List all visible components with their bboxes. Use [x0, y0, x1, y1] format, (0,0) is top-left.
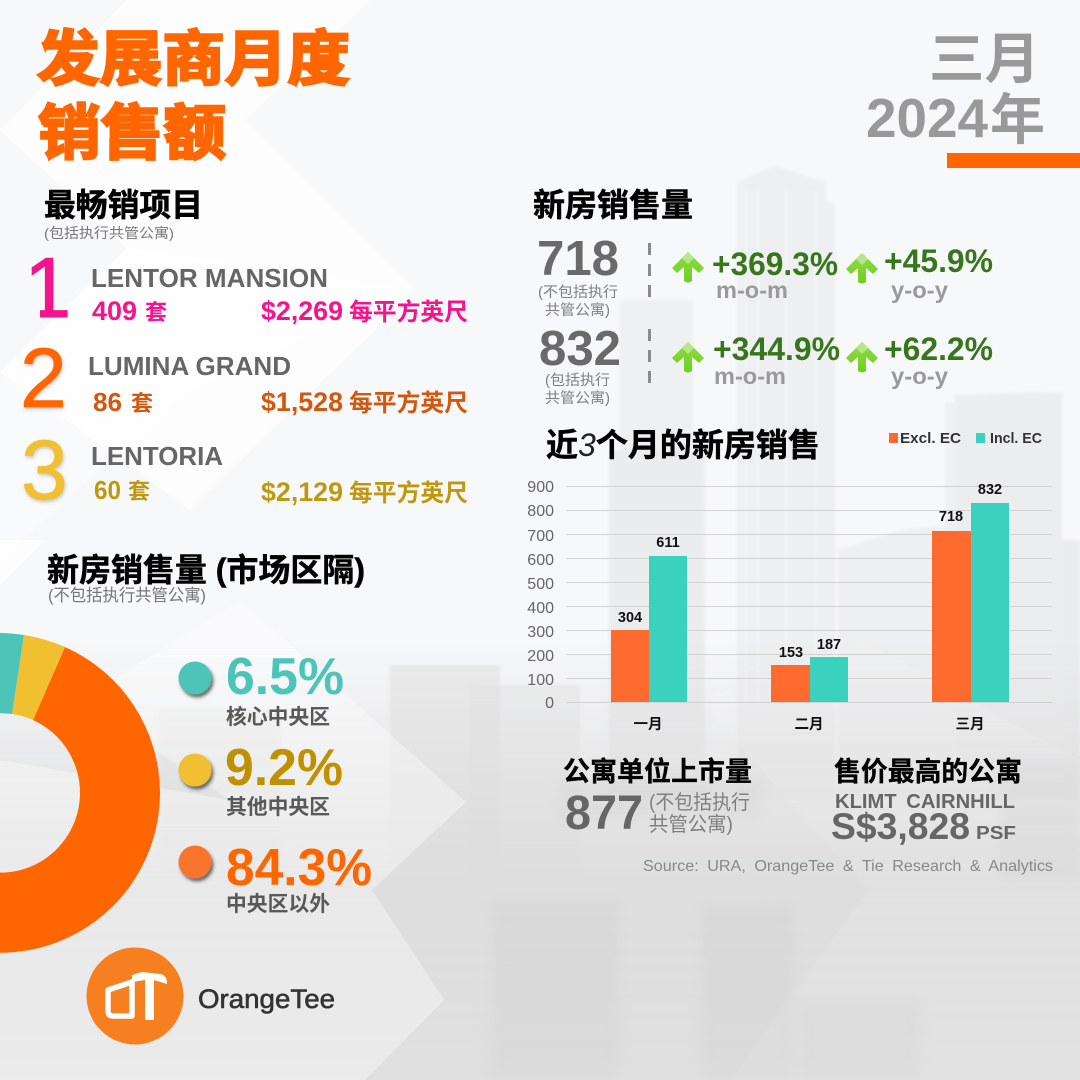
- bar chart: 153: [779, 645, 803, 661]
- legend: other central region: [178, 739, 343, 819]
- project 2: Lumina Grand: LUMINA GRAND: [88, 351, 291, 381]
- project 1: Lentor Mansion: 1: [24, 241, 71, 336]
- bar chart: 700: [527, 528, 554, 545]
- bar chart: 一月: [634, 717, 662, 733]
- stat: highest priced condo: PSF: [976, 823, 1016, 843]
- change row: excluding EC: +369.3%: [712, 246, 838, 282]
- change row: including EC: y-o-y: [891, 363, 948, 389]
- segment: outside central region: [0, 647, 160, 953]
- change row: excluding EC: [672, 243, 993, 303]
- date heading: 年: [990, 89, 1045, 151]
- project 3: Lentoria: $2,129: [261, 477, 343, 507]
- legend: core central region: 6.5%: [226, 648, 344, 706]
- change row: including EC: [672, 331, 993, 389]
- chart legend: Incl. EC: [990, 430, 1042, 447]
- stat: highest priced condo: [831, 757, 1022, 847]
- project 2: Lumina Grand: 每平方英尺: [349, 389, 468, 417]
- heading: top-selling projects: [44, 187, 203, 241]
- project 1: Lentor Mansion: [32, 258, 468, 324]
- bar chart: 500: [527, 576, 554, 593]
- bar chart: 三月: [956, 717, 984, 733]
- change row: excluding EC: y-o-y: [891, 277, 948, 303]
- date heading: 三月: [929, 28, 1040, 90]
- bar chart: 200: [527, 648, 554, 665]
- heading: sales by market segment: (不包括执行共管公寓): [48, 586, 206, 605]
- bar chart: 718: [939, 509, 963, 525]
- project 3: Lentoria: 3: [21, 423, 68, 517]
- bar chart: 304: [618, 610, 642, 626]
- change row: including EC: m-o-m: [714, 363, 786, 389]
- chart legend: [889, 430, 1042, 447]
- source note: Source: URA, OrangeTee & Tie Research & Analytics: [643, 858, 1053, 875]
- heading: top-selling projects: (包括执行共管公寓): [44, 225, 174, 241]
- stat: 718 excluding EC: (不包括执行: [538, 284, 618, 301]
- stat: 718 excluding EC: [537, 232, 619, 319]
- icon: up arrow: [672, 252, 704, 282]
- legend: outside central region: 中央区以外: [226, 893, 330, 916]
- legend: other central region: 其他中央区: [226, 796, 330, 819]
- bar chart: 900: [527, 479, 554, 496]
- stat: highest priced condo: 售价最高的公寓: [834, 757, 1022, 787]
- bar chart: 600: [527, 552, 554, 569]
- stat: 718 excluding EC: 718: [537, 232, 619, 286]
- change row: excluding EC: +45.9%: [884, 243, 993, 279]
- project 2: Lumina Grand: 86: [93, 387, 122, 417]
- stat: 832 including EC: 832: [539, 322, 621, 376]
- date accent bar: [947, 153, 1080, 168]
- chart legend: Excl. EC: [900, 430, 961, 447]
- legend: core central region: [178, 648, 344, 729]
- stat: launched units: 877: [565, 787, 643, 840]
- title: 发展商月度: [37, 26, 350, 93]
- project 3: Lentoria: 60: [94, 475, 121, 505]
- legend: outside central region: [178, 839, 372, 916]
- bar chart: 0: [545, 695, 554, 712]
- legend: core central region: 核心中央区: [226, 705, 330, 729]
- project 1: Lentor Mansion: LENTOR MANSION: [91, 263, 328, 293]
- stat: launched units: 共管公寓): [649, 813, 733, 836]
- heading: top-selling projects: 最畅销项目: [44, 187, 203, 223]
- project 1: Lentor Mansion: 套: [145, 300, 167, 325]
- icon: up arrow: [672, 342, 704, 372]
- change row: including EC: +62.2%: [884, 331, 993, 367]
- legend: outside central region: 84.3%: [226, 839, 372, 897]
- stat: 832 including EC: [539, 322, 621, 407]
- icon: up arrow: [846, 253, 878, 284]
- segment: other central region: [12, 635, 65, 720]
- logo: OrangeTee: [86, 948, 335, 1044]
- stat: highest priced condo: S$3,828: [831, 806, 970, 847]
- title: [37, 26, 350, 167]
- heading: sales by market segment: [47, 552, 365, 605]
- bar chart: 400: [527, 600, 554, 617]
- icon: up arrow: [846, 342, 878, 372]
- project 3: Lentoria: 每平方英尺: [349, 479, 468, 507]
- bar chart: 二月: [794, 717, 824, 733]
- stat: 832 including EC: (包括执行: [545, 372, 610, 389]
- stat: highest priced condo: KLIMT CAIRNHILL: [835, 791, 1015, 813]
- stat: launched units: (不包括执行: [649, 791, 750, 814]
- heading: new home sales: 新房销售量: [533, 187, 693, 223]
- stat: 832 including EC: 共管公寓): [545, 389, 610, 407]
- bar chart: [527, 479, 1052, 733]
- logo: OrangeTee: OrangeTee: [198, 984, 335, 1014]
- segment: core central region: [0, 633, 24, 714]
- project 3: Lentoria: 套: [128, 479, 150, 504]
- heading: last 3 months new sales: 近3个月的新房销售: [546, 427, 820, 463]
- donut chart: [0, 633, 160, 953]
- project 2: Lumina Grand: [20, 331, 468, 425]
- bar chart: 800: [527, 503, 554, 520]
- project 1: Lentor Mansion: 每平方英尺: [349, 298, 468, 326]
- legend: other central region: 9.2%: [225, 739, 343, 797]
- date heading: [866, 28, 1045, 151]
- project 2: Lumina Grand: 2: [20, 331, 67, 425]
- bar chart: 100: [527, 672, 554, 689]
- project 2: Lumina Grand: 套: [131, 391, 153, 416]
- project 2: Lumina Grand: $1,528: [261, 387, 343, 417]
- change row: including EC: +344.9%: [713, 331, 840, 367]
- stat: 718 excluding EC: 共管公寓): [545, 301, 610, 319]
- dashed divider: [648, 243, 651, 384]
- change row: excluding EC: m-o-m: [716, 277, 788, 303]
- bar chart: 832: [978, 482, 1002, 498]
- project 3: Lentoria: LENTORIA: [91, 441, 223, 471]
- title: 销售额: [38, 100, 226, 167]
- stat: launched units: [563, 756, 752, 840]
- project 1: Lentor Mansion: $2,269: [261, 296, 343, 326]
- bar chart: 300: [527, 624, 554, 641]
- bar chart: 611: [656, 535, 680, 551]
- project 3: Lentoria: [21, 423, 468, 517]
- project 1: Lentor Mansion: 409: [92, 296, 137, 326]
- heading: sales by market segment: 新房销售量 (市场区隔): [47, 552, 365, 588]
- bar chart: 187: [817, 637, 841, 653]
- date heading: 2024: [866, 87, 988, 149]
- stat: launched units: 公寓单位上市量: [563, 756, 752, 787]
